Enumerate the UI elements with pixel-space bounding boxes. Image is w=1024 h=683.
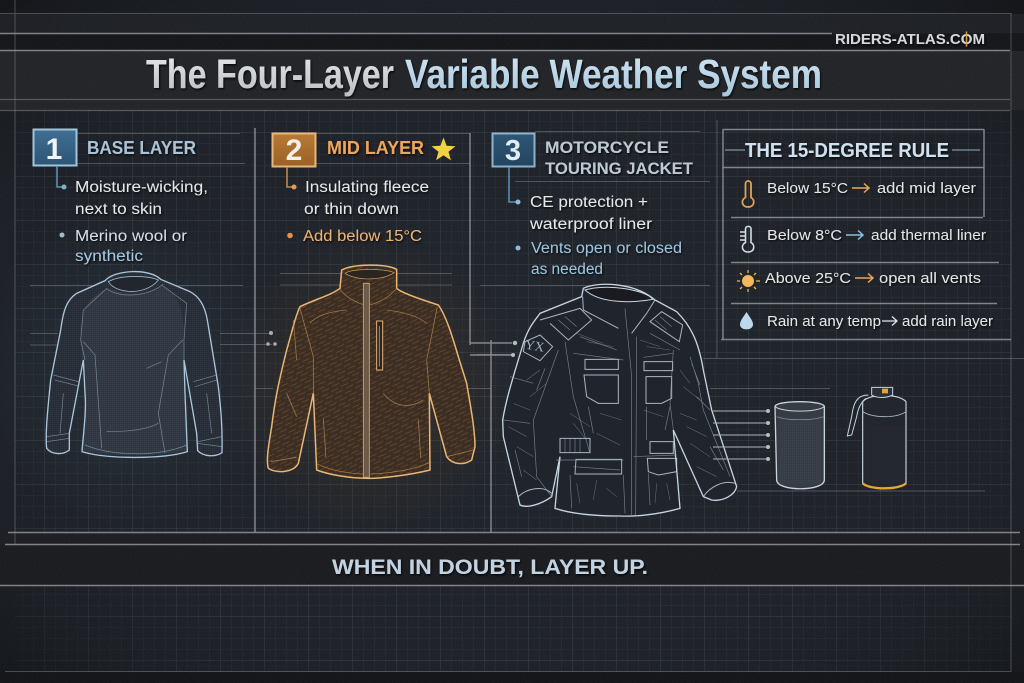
icon: water drop: [740, 312, 753, 329]
icon: base layer shirt: [46, 272, 222, 457]
rule row: above 25: Above 25°C: [765, 270, 851, 287]
panel: base layer: [34, 130, 245, 457]
badge 3: [492, 134, 534, 167]
badge 1: 1: [46, 133, 62, 166]
brand logo: RIDERS-ATLAS.COM: [835, 31, 985, 48]
icon: white thermometer: [740, 226, 754, 252]
rule row: below 15: add mid layer: [877, 180, 976, 197]
connector with bullet: [57, 166, 66, 190]
icon: thermal liner roll: [775, 402, 824, 489]
icon: rain layer stuff sack: [847, 387, 906, 488]
rule row: below 8: Below 8°C: [767, 227, 842, 244]
base layer text: [60, 179, 208, 265]
title: The Four-Layer: [146, 51, 394, 97]
heading: touring jacket: TOURING JACKET: [545, 159, 694, 178]
icon: fleece jacket: [267, 265, 475, 478]
mid layer text: or thin down: [304, 201, 399, 218]
rule row: below 8: [740, 226, 986, 252]
mid layer text: Add below 15°C: [303, 228, 422, 245]
rule row: rain: [740, 312, 993, 330]
jacket text: CE protection +: [530, 194, 648, 211]
connector with bullet: [287, 167, 296, 190]
badge 2: [272, 134, 316, 167]
badge 3: 3: [505, 135, 521, 167]
base layer text: next to skin: [75, 201, 162, 218]
icon: sun: [737, 270, 760, 292]
rule row: below 15: Below 15°C: [767, 180, 848, 197]
title: Variable Weather System: [405, 51, 822, 97]
panel: motorcycle touring jacket: [492, 132, 737, 516]
title: [146, 51, 822, 97]
icon: orange thermometer: [742, 181, 754, 207]
icon: touring jacket: [503, 284, 737, 516]
heading: touring jacket: [545, 138, 694, 178]
badge 1: [34, 130, 76, 166]
rule row: above 25: [737, 270, 981, 292]
heading: base layer: BASE LAYER: [87, 138, 196, 158]
rule row: above 25: open all vents: [879, 270, 981, 287]
base layer text: Merino wool or: [75, 228, 187, 245]
jacket text: [516, 194, 682, 278]
heading: mid layer: MID LAYER: [327, 138, 424, 158]
rule heading: THE 15-DEGREE RULE: [745, 139, 949, 162]
mid layer text: [287, 179, 429, 245]
connector with bullet: [509, 167, 520, 204]
footer tagline: WHEN IN DOUBT, LAYER UP.: [332, 556, 648, 579]
icon: star: [432, 138, 456, 160]
rule row: below 15: [742, 180, 976, 207]
connector lines to liners: [713, 409, 770, 461]
panel: mid layer: [267, 134, 475, 478]
icon: touring jacket: YX: [524, 337, 546, 355]
badge 2: 2: [286, 134, 302, 167]
rule row: below 8: add thermal liner: [871, 227, 986, 244]
jacket text: as needed: [531, 261, 603, 278]
rule row: rain: add rain layer: [902, 313, 993, 330]
jacket text: Vents open or closed: [531, 240, 682, 257]
rule row: rain: Rain at any temp: [767, 313, 881, 330]
base layer text: synthetic: [75, 248, 143, 265]
mid layer text: Insulating fleece: [305, 179, 429, 196]
heading: touring jacket: MOTORCYCLE: [545, 138, 669, 157]
jacket text: waterproof liner: [529, 216, 652, 233]
base layer text: Moisture-wicking,: [75, 179, 208, 196]
panel: the 15-degree rule: [721, 129, 1011, 340]
